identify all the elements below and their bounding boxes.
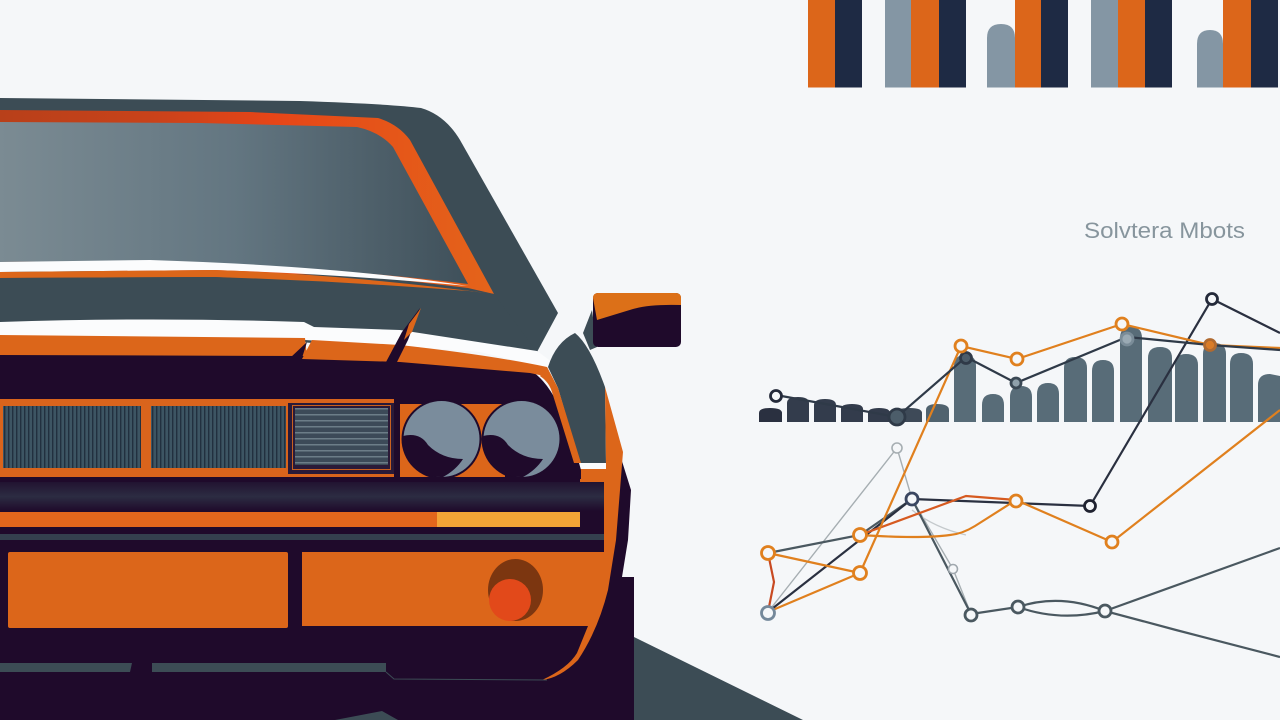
grille right bbox=[288, 403, 395, 474]
mirror bbox=[583, 293, 681, 350]
line chart markers bbox=[762, 294, 1218, 621]
grille center bbox=[151, 406, 286, 468]
hood crease spikes bbox=[290, 308, 421, 362]
car roof and cabin bbox=[0, 98, 558, 352]
line charts bbox=[768, 299, 1280, 657]
hood orange strip bbox=[0, 335, 552, 378]
white side trim bbox=[580, 463, 606, 469]
fender bbox=[548, 333, 606, 463]
chart title: Solvtera Mbots bbox=[1084, 218, 1245, 243]
gray thin line bbox=[768, 448, 971, 614]
headlight brow orange line bbox=[540, 367, 581, 463]
headlight panel bbox=[394, 399, 581, 479]
upper orange series bbox=[860, 324, 1280, 573]
hood white trim bbox=[0, 320, 552, 368]
top bar chart bbox=[808, 0, 1278, 88]
bar chart bbox=[759, 327, 1280, 422]
lower right orange panel bbox=[302, 552, 592, 626]
lower orange series bbox=[768, 553, 860, 612]
navy line series bbox=[768, 299, 1280, 612]
lower left orange panel bbox=[8, 552, 288, 628]
car front body bbox=[0, 350, 634, 720]
tail lamp bbox=[488, 559, 543, 621]
upper navy series bbox=[776, 337, 1280, 417]
bumper orange strip bbox=[0, 512, 437, 527]
windshield glass bbox=[0, 122, 468, 284]
grille surround bbox=[0, 399, 400, 477]
windshield white trim bbox=[0, 260, 468, 286]
lower slate strips bbox=[0, 663, 547, 720]
side orange panel bbox=[302, 387, 623, 680]
windshield frame bbox=[0, 110, 494, 294]
red accent line bbox=[768, 553, 774, 612]
bumper amber strip bbox=[437, 512, 580, 527]
headlight right bbox=[482, 399, 562, 479]
grille left bbox=[3, 406, 141, 468]
road bbox=[634, 637, 803, 720]
car illustration bbox=[0, 98, 681, 720]
headlight left bbox=[402, 399, 482, 479]
bumper bar bbox=[0, 477, 604, 552]
slate line series bbox=[768, 499, 1018, 614]
windshield orange trim bbox=[0, 270, 494, 294]
